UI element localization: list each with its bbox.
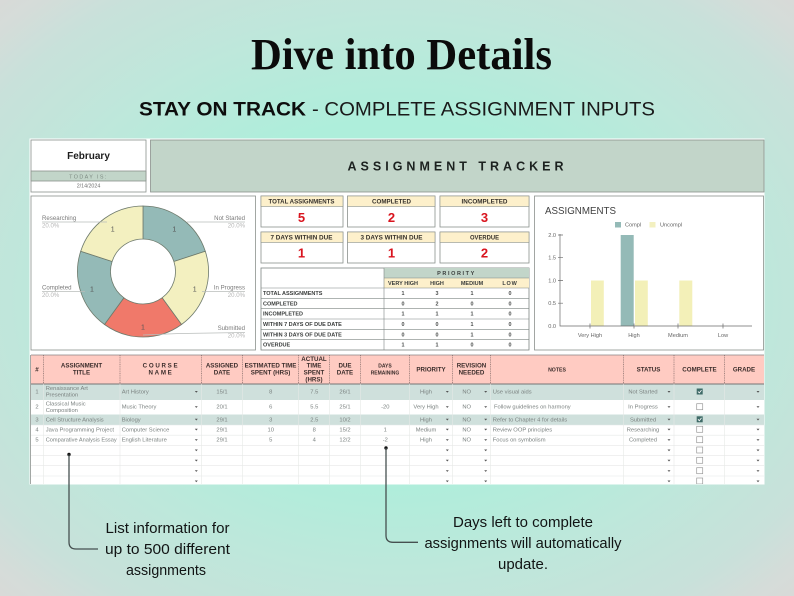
priority column headers	[388, 281, 518, 287]
row 3: 3	[269, 417, 272, 423]
card: completed: 2	[388, 210, 395, 225]
y axis labels: 1.0	[548, 278, 556, 284]
row 2: 2	[35, 405, 39, 411]
priority values	[402, 291, 512, 349]
x axis labels: Low	[718, 333, 729, 339]
complete checkboxes	[697, 388, 703, 484]
row 2: -20	[381, 405, 389, 411]
table header: DATE	[337, 370, 353, 377]
priority row labels: OVERDUE	[263, 343, 291, 349]
segment labels: In Progress	[214, 284, 245, 292]
segment values: 1	[141, 324, 145, 332]
row 4: 8	[313, 427, 316, 433]
connector: days remaining	[384, 446, 418, 542]
segment labels: Not Started	[214, 215, 245, 222]
segment labels: Submitted	[218, 325, 245, 332]
priority values: 0	[470, 301, 474, 307]
priority row labels: WITHIN 3 DAYS OF DUE DATE	[263, 332, 342, 338]
priority values: 0	[402, 332, 404, 338]
chart legend: Compl	[625, 222, 641, 228]
card: total assignments: TOTAL ASSIGNMENTS	[268, 198, 334, 205]
table header: SPENT (HRS)	[251, 370, 290, 377]
row 4: 4	[35, 427, 39, 433]
card: 3 days within due	[348, 232, 435, 263]
assignment table	[30, 355, 764, 484]
subtitle: STAY ON TRACK	[139, 100, 306, 120]
row 3: 29/1	[216, 417, 228, 423]
row 3: Submitted	[630, 417, 656, 423]
priority table: PRIORITY	[437, 271, 476, 277]
table header: ASSIGNMENT	[61, 363, 102, 370]
row 1: Art History	[122, 390, 149, 396]
row 2: 20/1	[216, 405, 228, 411]
card: 7 days within due	[261, 232, 343, 263]
subtitle: - COMPLETE ASSIGNMENT INPUTS	[312, 100, 655, 120]
segment values: 1	[90, 286, 94, 294]
panel: assignments bar chart	[534, 196, 764, 350]
row 2: Very High	[413, 405, 439, 411]
row 5: 12/2	[339, 438, 351, 444]
row 1: 1	[35, 390, 39, 396]
row 1	[36, 386, 658, 396]
row 1: Renaissance Art	[46, 386, 88, 392]
card: incompleted: INCOMPLETED	[462, 198, 508, 205]
table header: COURSE	[143, 363, 179, 370]
y axis labels: 2.0	[548, 233, 556, 239]
x axis labels	[578, 333, 729, 339]
priority values: 1	[436, 312, 438, 318]
dropdown carets	[195, 391, 760, 482]
date box: February	[67, 151, 110, 162]
x axis labels: Very High	[578, 333, 602, 339]
priority values: 0	[508, 322, 512, 328]
row 4: 15/2	[339, 427, 351, 433]
row 3: Refer to Chapter 4 for details	[493, 417, 567, 423]
row 4: 1	[384, 427, 387, 433]
priority values: 0	[436, 322, 438, 328]
segment labels: 20.0%	[228, 222, 246, 230]
table header	[31, 355, 764, 384]
segment labels: 20.0%	[42, 222, 60, 230]
row 3	[36, 418, 656, 422]
table header: ACTUAL	[301, 356, 327, 363]
card: overdue: 2	[481, 246, 488, 260]
table header: DATE	[214, 370, 230, 377]
priority values: 0	[402, 301, 404, 307]
row 4: Java Programming Project	[46, 427, 114, 433]
table header: DUE	[338, 363, 352, 370]
card: total assignments: 5	[298, 210, 305, 225]
table header: #	[35, 366, 39, 374]
priority values: 0	[508, 332, 512, 338]
row 5: -2	[383, 438, 388, 444]
chart legend: Uncompl	[660, 222, 682, 228]
row 1: Not Started	[628, 390, 658, 396]
table header: REMAINING	[371, 370, 399, 376]
row 5: NO	[462, 438, 472, 444]
callout: days left: assignments will automatically	[424, 535, 622, 552]
priority values: 1	[402, 343, 404, 349]
y axis labels: 0.5	[548, 301, 556, 307]
row 2: Music Theory	[122, 405, 156, 411]
priority values: 1	[436, 343, 438, 349]
date box	[31, 140, 146, 192]
callout: list information: List information for	[106, 520, 230, 537]
date box: 2/14/2024	[77, 184, 100, 190]
summary cards	[261, 196, 529, 263]
subtitle	[139, 100, 655, 120]
row 5: 29/1	[216, 438, 228, 444]
card: completed	[348, 196, 435, 227]
priority values: 0	[436, 332, 438, 338]
panel: assignments bar chart: ASSIGNMENTS	[545, 205, 616, 217]
callout: days left: Days left to complete	[453, 514, 593, 531]
row 3: NO	[462, 417, 472, 423]
row 2: Classical Music	[46, 401, 86, 407]
row 2: 25/1	[339, 405, 351, 411]
priority values: 2	[436, 301, 438, 307]
table header: NAME	[148, 370, 174, 377]
card: 3 days within due: 1	[388, 246, 395, 260]
segment values: 1	[172, 226, 176, 234]
row 5: Completed	[629, 438, 657, 444]
priority values: 1	[402, 291, 404, 297]
table header: COMPLETE	[682, 366, 717, 373]
table header: TITLE	[73, 370, 90, 377]
priority values: 0	[508, 343, 512, 349]
priority values: 0	[508, 301, 512, 307]
y axis labels	[548, 233, 556, 330]
row 5: 4	[313, 438, 317, 444]
row 1: NO	[462, 390, 472, 396]
header band: assignment tracker	[150, 140, 764, 192]
callout: list information	[105, 520, 231, 579]
table header: ASSIGNED	[206, 363, 239, 370]
segment labels	[42, 215, 246, 340]
priority row labels: COMPLETED	[263, 301, 298, 307]
table header: DAYS	[378, 364, 392, 370]
leader lines	[42, 222, 245, 335]
row 5: 5	[269, 438, 272, 444]
priority values: 1	[470, 332, 474, 338]
row 1: 26/1	[339, 390, 351, 396]
row 3: Biology	[122, 417, 141, 423]
segment values: 1	[111, 226, 115, 234]
row 2	[35, 401, 658, 414]
priority column headers: MEDIUM	[461, 281, 484, 287]
y axis labels: 1.5	[548, 256, 556, 262]
priority column headers: VERY HIGH	[388, 281, 418, 287]
table header: PRIORITY	[416, 366, 446, 373]
row 4	[36, 428, 659, 432]
segment labels: 20.0%	[228, 292, 246, 299]
priority column headers: HIGH	[430, 281, 444, 287]
segment labels: Completed	[42, 284, 71, 292]
card: overdue	[440, 232, 529, 263]
row 2: 5.5	[310, 405, 318, 411]
x axis labels: High	[628, 333, 640, 339]
row 5: Focus on symbolism	[493, 438, 546, 444]
table header: (HRS)	[305, 376, 323, 383]
row 5: English Literature	[122, 438, 167, 444]
row 4: NO	[462, 427, 472, 433]
highlighted rows	[31, 384, 764, 425]
row 4: Computer Science	[122, 427, 169, 433]
callout: list information: assignments	[126, 562, 206, 579]
card: total assignments	[261, 196, 343, 227]
priority table	[261, 268, 529, 350]
segment values	[90, 226, 197, 332]
row 5: 5	[35, 438, 39, 444]
priority values: 1	[470, 312, 474, 318]
card: incompleted: 3	[481, 210, 488, 225]
title: Dive into Details	[251, 30, 552, 79]
segment labels: 20.0%	[228, 332, 246, 340]
table header: STATUS	[637, 366, 660, 373]
y axis labels: 0.0	[548, 324, 556, 330]
priority values: 3	[436, 291, 438, 297]
table header: GRADE	[733, 366, 755, 373]
row 4: 29/1	[216, 427, 228, 433]
priority values: 1	[402, 312, 404, 318]
row 5: High	[420, 438, 432, 444]
callout: list information: up to 500 different	[105, 541, 231, 558]
panel: status donut chart	[31, 196, 256, 350]
header band: assignment tracker: ASSIGNMENT TRACKER	[348, 160, 564, 174]
priority values: 1	[470, 291, 474, 297]
chart legend	[615, 222, 682, 228]
card: 7 days within due: 7 DAYS WITHIN DUE	[270, 234, 332, 241]
table header: REVISION	[457, 363, 487, 370]
callout: days left: update.	[498, 556, 548, 573]
connector: list information	[67, 453, 98, 549]
priority values: 0	[402, 322, 404, 328]
row 1: 7.5	[310, 390, 318, 396]
card: incompleted	[440, 196, 529, 227]
row 2: Follow guidelines on harmony	[494, 405, 571, 411]
row 1: 8	[269, 390, 272, 396]
segment labels: Researching	[42, 215, 76, 222]
card: 3 days within due: 3 DAYS WITHIN DUE	[360, 234, 422, 241]
donut segments	[77, 206, 209, 337]
priority values: 1	[470, 322, 474, 328]
row 3: High	[420, 417, 432, 423]
row 4: Medium	[416, 427, 436, 433]
table header: SPENT	[304, 370, 325, 377]
row 1: Use visual aids	[493, 390, 532, 396]
row 5: Comparative Analysis Essay	[46, 438, 117, 444]
table header: TIME	[307, 363, 321, 370]
row 4: Review OOP principles	[493, 427, 552, 433]
priority values: 0	[508, 291, 512, 297]
table header: ESTIMATED TIME	[245, 363, 296, 370]
row 2: In Progress	[628, 405, 658, 411]
row 1: Presentation	[46, 393, 78, 399]
row 1: High	[420, 390, 432, 396]
row 1: 15/1	[216, 390, 228, 396]
row 4: 10	[267, 427, 274, 433]
priority row labels	[263, 291, 342, 349]
table header: NOTES	[548, 367, 566, 373]
row 2: Composition	[46, 408, 78, 414]
date box: TODAY IS:	[69, 174, 108, 180]
row 5	[36, 438, 657, 442]
priority row labels: TOTAL ASSIGNMENTS	[263, 291, 323, 297]
row 3: 2.5	[310, 417, 318, 423]
priority row labels: WITHIN 7 DAYS OF DUE DATE	[263, 322, 342, 328]
row 3: Cell Structure Analysis	[46, 417, 104, 423]
row 3: 3	[35, 417, 39, 423]
table header: NEEDED	[459, 370, 485, 377]
card: overdue: OVERDUE	[470, 234, 499, 241]
row 3: 10/2	[339, 417, 351, 423]
priority values: 0	[470, 343, 474, 349]
callout: days left	[424, 514, 622, 573]
segment labels: 20.0%	[42, 292, 60, 299]
row 2: 6	[269, 405, 272, 411]
x axis labels: Medium	[668, 333, 688, 339]
segment values: 1	[193, 286, 197, 294]
priority row labels: INCOMPLETED	[263, 312, 303, 318]
tracker sheet background	[30, 138, 764, 484]
bars	[591, 235, 692, 326]
priority column headers: LOW	[502, 281, 518, 287]
row 4: Researching	[627, 427, 659, 433]
card: completed: COMPLETED	[372, 198, 412, 205]
row 2: NO	[462, 405, 472, 411]
priority values: 0	[508, 312, 512, 318]
card: 7 days within due: 1	[298, 246, 305, 260]
